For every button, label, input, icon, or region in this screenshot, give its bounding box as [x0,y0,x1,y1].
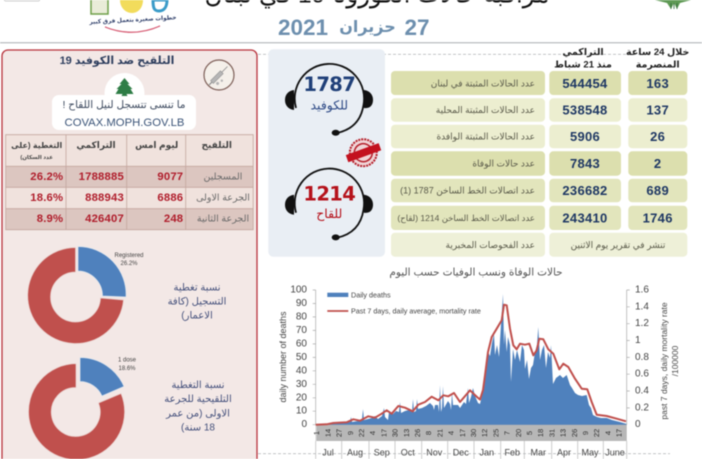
date band: 17 [458,429,467,437]
text: first dose coverage: نسبة التغطية [171,380,225,391]
date band: 12 [480,429,489,437]
icon: headset vaccine hotline [285,169,373,240]
text: registration coverage [168,282,226,322]
vaccination heading: التلقيح ضد الكوفيد 19 [60,55,174,67]
table: vaccination counts: 26.2% [30,171,63,183]
row: confirmed cases: 163 [646,76,669,91]
date band: 9 [581,431,590,435]
month labels: May [581,448,599,458]
left axis labels: 80 [296,311,307,322]
month labels: Oct [401,448,415,458]
date: 2021 [278,15,328,40]
table: vaccination counts: 6886 [157,192,183,204]
row: confirmed cases: 544454 [562,76,608,91]
month labels: Nov [426,448,443,458]
text: first dose coverage: الاولى (من عمر [165,408,230,420]
table: vaccination counts [6,135,253,230]
row: local cases [391,98,687,122]
row: hotline 1214 calls [391,206,687,230]
left axis labels: 50 [296,352,307,363]
date: حزيران [339,19,396,36]
icon: headset covid hotline [285,64,373,136]
row: deaths: 7843 [570,156,600,171]
legend: Daily deaths [351,290,391,300]
table: vaccination counts: ليوم امس [135,140,178,151]
logo: small steps campaign: خطوات صغيرة بتعمل فرق كبير [88,14,177,26]
left axis labels: 60 [296,338,307,349]
date band: 30 [469,429,478,437]
column header: cumulative [554,47,612,70]
date band: 18 [536,429,545,437]
right axis labels: 1.4 [635,301,649,312]
row: hotline 1214 calls: عدد اتصالات الخط الساخن 1214 (لقاح) [397,213,535,223]
text: first dose coverage [164,380,232,434]
left axis labels: 10 [296,406,307,417]
date band: 4 [447,431,456,435]
right axis labels: 0 [635,419,641,430]
right axis title: past 7 days, daily mortality rate [659,302,669,420]
date band: 5 [525,431,534,435]
legend: Past 7 days, daily average, mortality rate [351,306,481,316]
callout: register for vaccine: ما تنسى تتسجل لنيل اللقاح ! [62,99,186,111]
hotline label covid: للكوفيد [310,99,348,114]
date band: 22 [592,429,601,437]
hotline number vaccine: 1214 [303,182,355,206]
icon: cedar [116,78,134,96]
row: imported cases: 26 [650,129,665,144]
date band: 1 [312,431,321,435]
date band: 13 [559,429,568,437]
donut chart: registered: Registered [114,253,144,259]
right axis labels: 1 [635,335,641,346]
donut chart: first dose [29,358,137,459]
right axis labels: 1.2 [635,318,649,329]
month labels: Aug [347,448,363,458]
month labels: Jul [322,448,334,458]
table: vaccination counts: 888943 [85,192,124,204]
axes [313,290,630,425]
chart heading: حالات الوفاة ونسب الوفيات حسب اليوم [389,267,563,279]
date band: 13 [402,429,411,437]
left axis labels: 30 [296,379,307,390]
left axis labels: 90 [296,298,307,309]
row: local cases: عدد الحالات المثبتة المحلية [436,105,535,115]
date band: 22 [357,429,366,437]
month labels: Jan [479,448,494,458]
logo: small steps campaign [88,0,177,32]
left axis title: daily number of deaths [278,311,288,403]
row: laboratory tests: تنشر في تقرير يوم الاثنين [571,240,666,250]
column header: last 24 hours [626,47,689,70]
left axis labels: 40 [296,365,307,376]
top-left small box [4,0,40,1]
date: 27 [404,15,430,40]
month labels: Apr [557,448,571,458]
right axis labels: 0.2 [635,402,649,413]
donut chart: first dose: 1 dose [118,358,137,364]
row: imported cases: 5906 [570,129,600,144]
date band: 4 [368,431,377,435]
column header: cumulative: منذ 21 شباط [554,60,612,70]
date band: 25 [491,429,500,437]
date band: 7 [503,431,512,435]
right axis labels [635,284,649,430]
donut chart: registered [28,246,144,343]
column header: last 24 hours: المنصرمة [636,60,680,70]
row: hotline 1787 calls: 689 [646,183,669,198]
date band: 17 [615,429,624,437]
row: hotline 1214 calls: 1746 [643,210,673,226]
row: hotline 1214 calls: 243410 [562,210,608,226]
month labels: Sep [374,448,390,458]
month labels: Mar [531,448,546,458]
row: laboratory tests [391,233,687,257]
row: laboratory tests: عدد الفحوصات المخبرية [446,240,535,250]
logo: cedar top right [655,0,691,9]
text: registration coverage: الاعمار) [181,310,213,322]
text: registration coverage: نسبة تغطية [173,282,221,294]
month labels: Feb [505,448,520,458]
left axis labels: 20 [296,392,307,403]
column header: cumulative: التراكمي [562,47,604,58]
table: vaccination counts: عدد السكان) [20,154,53,161]
table: vaccination counts: التغطية (على [11,141,63,150]
left axis labels: 100 [290,284,307,296]
row: confirmed cases: عدد الحالات المثبتة في لبنان [431,78,535,88]
right axis labels: 0.8 [635,352,649,363]
date band: 30 [391,429,400,437]
date band: 31 [547,429,556,437]
table: vaccination counts: المسجلين [204,172,242,182]
row: hotline 1787 calls [391,179,687,202]
date band: 26 [570,429,579,437]
donut chart: first dose: 18.6% [118,366,136,372]
date band: 27 [335,429,344,437]
left axis labels [290,284,307,430]
icon: stamp [342,134,385,171]
row: deaths [391,151,687,176]
table: vaccination counts: الجرعة الثانية [197,214,249,224]
right axis labels: 0.6 [635,369,649,380]
callout: register for vaccine: COVAX.MOPH.GOV.LB [65,117,184,129]
hotline number covid: 1787 [303,73,355,96]
table: vaccination counts: التلقيح [201,140,232,151]
row: imported cases [391,125,687,148]
hotline label vaccine: للقاح [316,207,342,221]
left axis labels: 70 [296,325,307,336]
left axis labels: 0 [301,419,307,430]
table: vaccination counts: التراكمي [76,140,116,151]
month labels [316,441,627,459]
row: local cases: 538548 [562,102,608,118]
line: 7-day mortality rate [316,305,626,425]
text: first dose coverage: التلقيحية للجرعة [164,394,232,405]
row: hotline 1787 calls: عدد اتصالات الخط الساخن 1787 (1) [400,186,535,196]
row: imported cases: عدد الحالات المثبتة الوافدة [436,132,535,142]
date band: 26 [413,429,422,437]
row: deaths: 2 [654,156,661,171]
date band: 9 [346,431,355,435]
date band: 14 [323,429,332,437]
table: vaccination counts: 426407 [85,213,124,225]
date band: 20 [514,429,523,437]
panel: statistics table [391,47,689,257]
icon: syringe [204,60,234,90]
date band: 4 [603,431,612,435]
chart: daily deaths and mortality rate [278,284,680,459]
row: local cases: 137 [646,102,669,118]
right axis title [659,302,680,420]
right axis title: /100000 [670,345,680,376]
table: vaccination counts: 9077 [157,171,183,183]
row: confirmed cases [391,71,687,95]
column header: last 24 hours: خلال 24 ساعة [626,47,689,58]
table: vaccination counts: الجرعة الاولى [196,192,250,204]
date [278,15,430,40]
right axis labels: 0.4 [635,386,649,396]
date band: 17 [379,429,388,437]
date band: 8 [424,431,433,435]
date band: 21 [435,429,444,437]
panel: hotlines [268,49,385,257]
text: registration coverage: التسجيل (كافة [168,296,226,308]
table: vaccination counts: 8.9% [37,213,63,225]
panel: vaccination [2,50,257,459]
bars: daily deaths [316,294,627,425]
right axis labels: 1.6 [635,284,649,296]
legend [327,290,481,316]
donut chart: registered: 26.2% [120,261,138,267]
row: hotline 1787 calls: 236682 [562,183,608,198]
text: first dose coverage: 18 سنة) [181,422,215,434]
table: vaccination counts: 1788885 [79,171,124,183]
table: vaccination counts: 18.6% [30,192,63,204]
month labels: June [605,448,625,458]
table: vaccination counts: 248 [164,213,183,225]
month labels: Dec [453,448,469,458]
callout: register for vaccine [52,73,196,130]
date band [312,425,627,441]
row: deaths: عدد حالات الوفاة [472,158,535,168]
